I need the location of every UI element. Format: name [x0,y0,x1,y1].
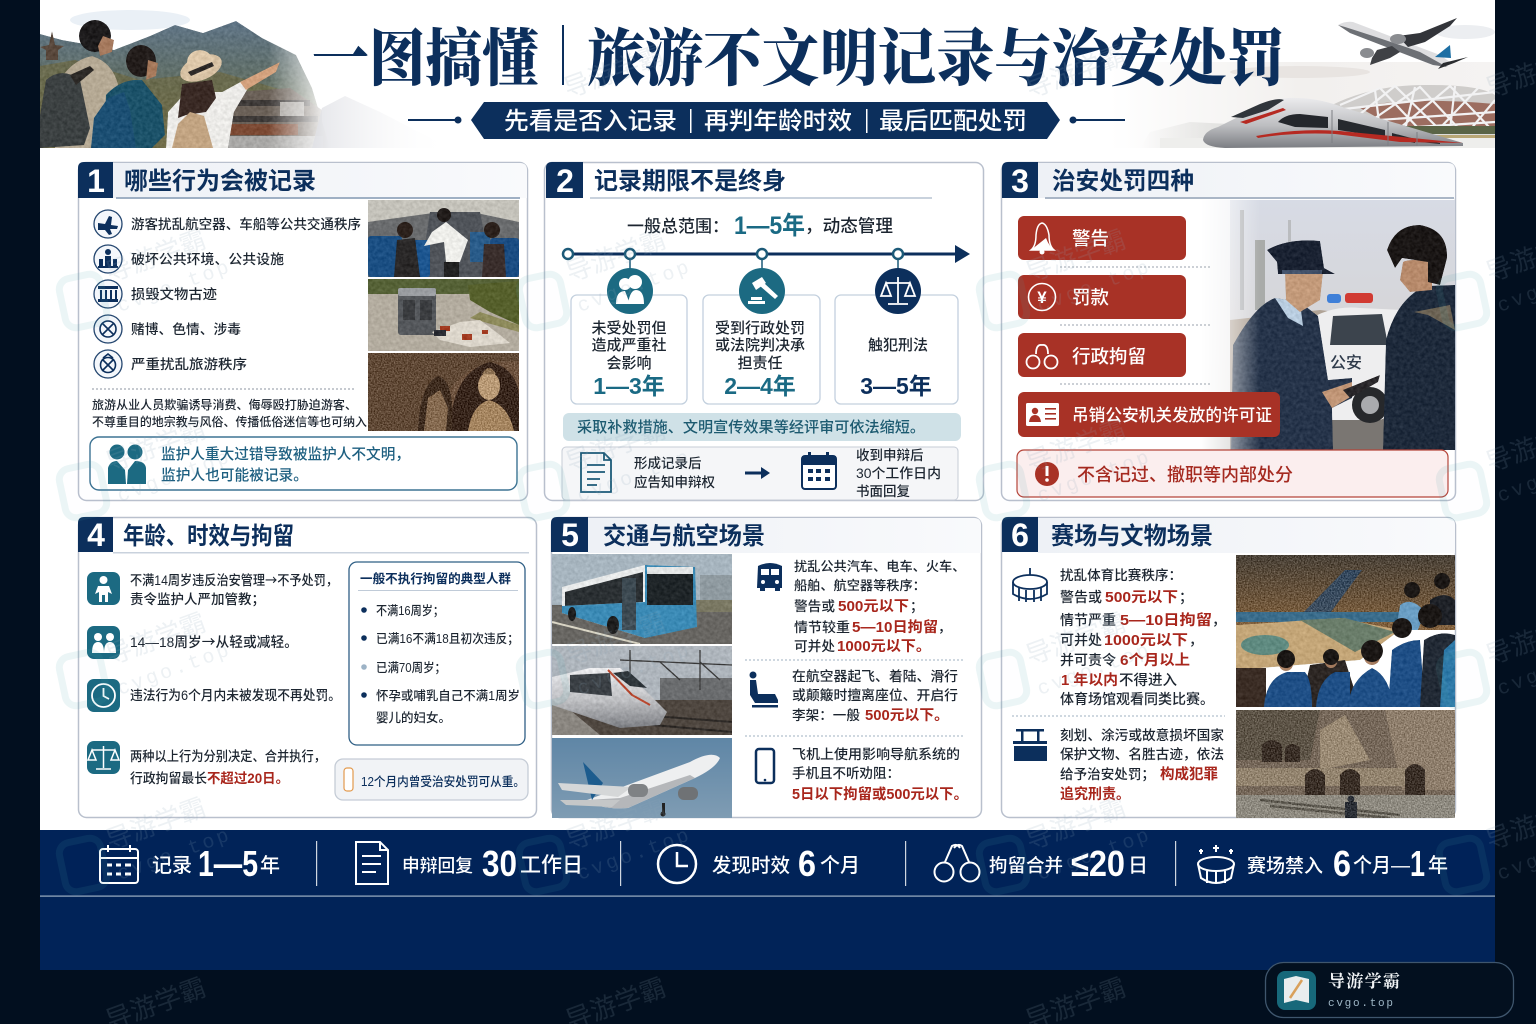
watermark pattern: 导游学霸 [562,792,670,856]
photo: cabin disturbance [368,200,519,277]
woman [166,80,250,148]
stat: combined detention: 拘留合并 [989,855,1063,876]
note: repeat offence: 12个月内曾受治安处罚可从重。 [361,774,525,789]
section: phone on plane [756,746,968,803]
icon: stadium [1013,568,1047,602]
heading 5: 交通与航空场景 [603,522,765,550]
stat: objection reply: 工作日 [520,854,583,877]
officer [1231,240,1380,450]
badge 2 [546,162,583,199]
section: phone on plane: 5日以下拘留或500元以下。 [792,785,968,803]
watermark pattern: 导游学霸 [1022,792,1130,856]
train [1203,98,1463,148]
header banner [40,0,1495,148]
card: 2 to 4 years: 2—4年 [724,373,796,399]
list of recorded behaviours: 破坏公共环境、公共设施 [131,251,285,267]
stat: record period: 年 [260,854,280,877]
photo: tourists pointing at mountain temple [40,10,374,148]
watermark pattern: cvgo.top [115,446,235,509]
brand badge: cvgo.top [1328,998,1393,1010]
note: repeat offence [335,759,528,800]
section: sports venue: 并可责令 [1060,652,1116,668]
section: aircraft seat: 或颠簸时擅离座位、开启行 [792,687,958,703]
stat: record period: 记录 [152,854,192,877]
photo: plane, high-speed train and stadium [1152,18,1495,148]
icon: calendar [802,452,836,489]
heading 3: 治安处罚四种 [1052,168,1194,195]
badge 1 [78,162,113,199]
watermark pattern: 导游学霸 [562,224,670,288]
icon: phone [756,749,774,783]
section: public transport: 1000元以下。 [837,639,931,655]
list of recorded behaviours: 赌博、色情、涉毒 [131,321,241,337]
section: public transport: 5—10日拘留 [852,618,938,636]
man 1 [55,56,118,148]
box: people generally not detained: 婴儿的妇女。 [376,710,451,725]
panel 5: transport and aviation [551,517,982,818]
stat: objection reply [356,842,583,884]
card: 2 to 4 years: 担责任 [737,355,783,372]
button: fine: 罚款 [1072,287,1110,308]
watermark pattern: 导游学霸 [102,792,210,856]
section: cultural relics: 构成犯罪 [1160,765,1218,783]
badge 4: 4 [87,517,105,553]
icon: clock [658,845,696,883]
arrow [745,467,770,479]
subtitle ribbon [408,102,1125,139]
watermark pattern: 导游学霸 [102,414,210,478]
watermark pattern: cvgo.top [1035,446,1155,509]
section: phone on plane: 飞机上使用影响导航系统的 [792,746,960,762]
panel 2: record period [544,162,984,500]
band: may be shortened: 采取补救措施、文明宣传效果等经评审可依法缩短。 [577,418,925,436]
section: aircraft seat: 在航空器起飞、着陆、滑行 [792,668,958,684]
card: 3 to 5 years: 触犯刑法 [868,337,928,354]
card: 2 to 4 years: 或法院判决承 [715,336,805,354]
card: 2 to 4 years: 受到行政处罚 [715,319,805,337]
brand badge: 导游学霸 [1328,972,1400,991]
watermark pattern: cvgo.top [1035,639,1155,702]
watermark pattern: 导游学霸 [1022,40,1130,104]
section: sports venue: ， [1189,632,1203,648]
box: people generally not detained: 已满16不满18且初次违反； [376,631,519,646]
section: cultural relics: 保护文物、名胜古迹，依法 [1060,746,1224,762]
card: 1 to 3 years: 未受处罚但 [591,319,667,337]
note: internal sanctions excluded: 不含记过、撤职等内部处分 [1077,465,1293,485]
row: combined detention: 不超过20日。 [207,771,289,786]
list of recorded behaviours [94,210,361,378]
general range line: 一般总范围： [627,217,729,236]
photo: high-speed rail [552,646,732,735]
icon: calendar [100,845,138,883]
section: public transport: 可并处 [794,638,836,654]
section: sports venue: ， [1212,612,1226,628]
photo: officer talking with a traveller: 公安 [1330,354,1362,372]
card: 3 to 5 years [835,268,958,404]
panel 4: age, limitation and detention [78,517,536,818]
heading 1: 哪些行为会被记录 [124,168,316,195]
card: 3 to 5 years: 3—5年 [860,373,932,399]
row: 14 to 18: 14—18周岁→从轻或减轻。 [130,632,298,652]
watermark pattern: 导游学霸 [560,40,668,104]
section: sports venue: 5—10日拘留 [1120,611,1212,629]
row: combined detention: 行政拘留最长 [130,771,207,786]
watermark pattern: cvgo.top [575,639,695,702]
section: sports venue: 不得进入 [1119,672,1177,689]
badge 6 [1002,517,1038,553]
list of recorded behaviours: 损毁文物古迹 [131,286,218,302]
watermark pattern: 导游学霸 [1022,607,1130,671]
icon: relic monument [1013,729,1047,761]
section: cultural relics [1013,727,1225,803]
section: public transport [757,558,965,655]
heading 2: 记录期限不是终身 [594,168,786,195]
stat: venue ban: 6 [1333,843,1351,884]
section: sports venue: 1000元以下 [1104,633,1188,649]
photo: litter around a bin [368,279,519,351]
icon: document [356,842,388,884]
section: sports venue: 500元以下 [1105,590,1178,606]
watermark pattern: cvgo.top [575,824,695,887]
section: sports venue: 警告或 [1060,589,1102,605]
subtitle ribbon: 先看是否入记录 [504,108,677,135]
icon: seat [750,672,778,708]
card: 1 to 3 years: 1—3年 [593,373,665,399]
icon: stadium with stars [1198,845,1234,884]
row: combined detention [87,741,326,786]
button: fine [1018,275,1186,319]
badge 4 [78,517,113,553]
section: sports venue [1013,567,1226,707]
section: cultural relics: 给予治安处罚； [1060,767,1155,783]
traveller [1383,225,1455,450]
plane [1338,22,1450,67]
badge 3 [1002,162,1038,199]
band: may be shortened [563,413,961,441]
section: public transport: 500元以下 [838,599,909,615]
box: people generally not detained [349,562,525,745]
badge 6: 6 [1011,517,1029,553]
stat: venue ban: 赛场禁入 [1247,855,1323,877]
row: under 14: 不满14周岁违反治安管理→不予处罚， [130,569,338,589]
section: cultural relics: 追究刑责。 [1060,785,1130,803]
section: public transport: 扰乱公共汽车、电车、火车、 [794,558,965,574]
row: under 14 [87,569,338,608]
row: under 14: 责令监护人严加管教； [130,591,265,608]
note on tourism practitioners: 不尊重目的地宗教与风俗、传播低俗迷信等也可纳入 [92,414,367,429]
panel 1: which behaviours are recorded [78,162,528,500]
stat: venue ban: 年 [1428,854,1448,877]
general range line: 1—5年 [734,212,805,240]
photo: rock-cut grotto site [1236,710,1455,818]
main title: 旅游不文明记录与治安处罚 [587,25,1285,94]
panel 3: four public-security penalties [1002,162,1456,500]
watermark pattern: 导游学霸 [562,607,670,671]
main sheet [40,0,1495,830]
section: public transport: ； [910,599,924,615]
row: six-month limitation: 违法行为6个月内未被发现不再处罚。 [130,688,341,703]
watermark pattern: 导游学霸 [562,414,670,478]
icon: handcuffs [934,845,980,882]
main title: 一图搞懂 [312,25,539,94]
watermark pattern: cvgo.top [575,256,695,319]
watermark pattern: cvgo.top [115,824,235,887]
general range line [627,212,893,240]
box: notification and objection: 30个工作日内 [856,466,941,481]
button: warning: 警告 [1072,228,1109,249]
panel 6: stadium and relic scenes [1002,517,1456,818]
watermark pattern: 导游学霸 [1022,414,1130,478]
section: aircraft seat: 李架：一般 [792,708,861,723]
watermark pattern: cvgo.top [115,256,235,319]
watermark pattern: 导游学霸 [1022,224,1130,288]
box: notification and objection: 应告知申辩权 [634,474,715,490]
box: notification and objection [562,447,958,500]
badge 3: 3 [1011,163,1029,199]
stat: objection reply: 申辩回复 [402,856,473,876]
badge 2: 2 [556,163,574,199]
icon: brand map logo [1277,971,1316,1010]
icon: document [581,453,611,492]
button: warning [1018,216,1186,260]
box: people generally not detained: 不满16周岁； [376,603,444,618]
brand badge [1266,962,1514,1018]
box: notification and objection: 形成记录后 [634,456,702,471]
section: public transport: ， [938,620,952,635]
button: licence revocation [1018,392,1280,437]
section: sports venue: 1 年以内 [1061,671,1118,689]
stat: objection reply: 30 [482,843,517,884]
icon: guardians [108,444,146,484]
stadium lattice [1332,85,1495,134]
stat: combined detention: ≤20 [1071,843,1125,884]
section: sports venue: 扰乱体育比赛秩序： [1060,567,1182,583]
callout: guardian responsibility: 监护人也可能被记录。 [161,467,308,484]
section: sports venue: ； [1179,589,1193,606]
stat: venue ban: 1 [1410,843,1425,884]
box: people generally not detained: 一般不执行拘留的典型人群 [360,571,511,586]
heading 4: 年龄、时效与拘留 [123,523,294,550]
box: notification and objection: 收到申辩后 [856,448,924,463]
icon: bus [757,563,782,591]
subtitle ribbon: 再判年龄时效 [704,108,852,135]
stat: record period: 1—5 [198,843,258,884]
note on tourism practitioners: 旅游从业人员欺骗诱导消费、侮辱殴打胁迫游客、 [92,397,357,412]
card: 1 to 3 years: 会影响 [606,354,652,372]
photo: stone Buddha grotto [368,353,519,431]
subtitle ribbon: 最后匹配处罚 [879,108,1027,135]
row: combined detention: 两种以上行为分别决定、合并执行， [130,748,326,764]
watermark pattern: cvgo.top [115,639,235,702]
card: 1 to 3 years: 造成严重社 [591,337,667,354]
section: public transport: 警告或 [794,598,836,614]
section: aircraft seat: 500元以下。 [865,708,949,724]
stat: venue ban: 个月— [1353,854,1410,877]
section: sports venue: 6个月以上 [1120,652,1190,669]
box: notification and objection: 书面回复 [856,483,910,499]
box: people generally not detained: 怀孕或哺乳自己不满1周岁 [376,688,520,703]
list of recorded behaviours: 游客扰乱航空器、车船等公共交通秩序 [131,216,361,232]
photo: city bus [552,554,732,644]
stat: discovery limit: 发现时效 [712,855,790,877]
photo: basketball arena crowd [1236,555,1455,707]
watermark pattern: 导游学霸 [102,224,210,288]
watermark pattern: cvgo.top [1035,256,1155,319]
watermark pattern: 导游学霸 [102,607,210,671]
section: phone on plane: 手机且不听劝阻： [792,765,900,781]
button: administrative detention: 行政拘留 [1072,346,1146,367]
card: 2 to 4 years [703,268,820,404]
button: administrative detention [1018,333,1186,377]
card: 1 to 3 years [571,268,687,404]
stat: combined detention [934,843,1148,884]
watermark pattern: cvgo.top [575,446,695,509]
badge 5 [551,517,588,553]
section: sports venue: 可并处 [1060,632,1102,648]
badge 1: 1 [87,163,105,199]
police car [1305,308,1405,420]
timeline arrow [563,245,970,272]
section: cultural relics: 刻划、涂污或故意损坏国家 [1060,727,1225,743]
button: fine: ¥ [1037,288,1047,307]
section: public transport: 情节较重 [794,619,850,635]
heading 6: 赛场与文物场景 [1051,522,1213,550]
section: sports venue: 体育场馆观看同类比赛。 [1060,691,1214,707]
section: public transport: 船舶、航空器等秩序： [794,577,926,593]
stat: combined detention: 日 [1128,855,1148,877]
watermark pattern: cvgo.top [1035,824,1155,887]
note: internal sanctions excluded [1017,450,1448,497]
button: licence revocation: 吊销公安机关发放的许可证 [1072,406,1272,425]
man 2 [104,80,165,148]
stat: discovery limit: 6 [798,843,816,884]
stat: discovery limit [658,843,860,884]
row: six-month limitation [87,679,341,712]
badge 5: 5 [561,517,579,553]
general range line: ，动态管理 [805,216,893,236]
photo: officer talking with a traveller [1209,200,1455,450]
callout: guardian responsibility: 监护人重大过错导致被监护人不文明， [161,445,410,463]
section: aircraft seat [750,668,958,724]
stat: venue ban [1198,843,1448,884]
photo: airliner take-off [552,738,732,818]
note on tourism practitioners [92,397,367,429]
main title [312,25,1285,94]
section: sports venue: 情节严重 [1060,612,1116,628]
stat: discovery limit: 个月 [820,854,860,877]
row: 14 to 18 [87,626,298,659]
box: people generally not detained: 已满70周岁； [376,660,446,675]
list of recorded behaviours: 严重扰乱旅游秩序 [131,356,247,372]
callout: guardian responsibility [90,437,517,490]
bottom summary band [40,830,1495,970]
stat: record period [100,843,280,884]
